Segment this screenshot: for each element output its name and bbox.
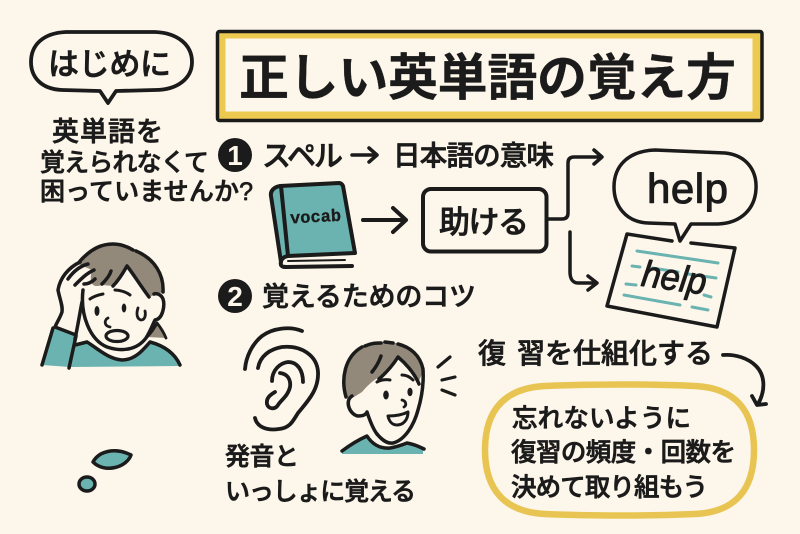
- speech bubble: spoken word: [614, 150, 756, 241]
- intro question text: [40, 117, 253, 206]
- icon: vocab book: [270, 183, 355, 267]
- meaning box: 助ける: [439, 205, 529, 240]
- speech bubble: introduction: [31, 32, 192, 103]
- pronunciation caption: [225, 443, 416, 506]
- intro question text: 英単語を: [52, 117, 163, 147]
- shirt: [342, 436, 423, 454]
- raised hand: [55, 262, 82, 339]
- pronunciation caption: 発音と: [225, 443, 299, 471]
- arrow: book to meaning box: [363, 208, 406, 232]
- meaning box: [423, 189, 546, 252]
- branch arrow to spoken word: [547, 150, 602, 219]
- branch arrow to written word: [570, 232, 597, 290]
- callout text: 忘れないように: [512, 405, 691, 433]
- step 1 badge: [218, 138, 252, 172]
- title banner: [218, 32, 762, 120]
- sleeve and shoulders: [42, 328, 180, 368]
- icon: worried person: [42, 244, 180, 368]
- step 2 heading: 覚えるためのコツ: [262, 282, 476, 312]
- step 1 heading: 日本語の意味: [393, 140, 554, 171]
- step 1 heading: スペル: [262, 141, 343, 173]
- step 2 badge: [218, 279, 252, 313]
- card word: help: [639, 253, 709, 303]
- review callout box: 決めて取り組もう: [511, 474, 708, 502]
- pronunciation caption: いっしょに覚える: [225, 478, 416, 506]
- intro question text: 覚えられなくて: [40, 149, 209, 177]
- curved arrow to review box: [723, 355, 766, 405]
- bubble label: はじめに: [48, 47, 171, 82]
- hair: [78, 244, 163, 297]
- sweater: [70, 342, 180, 367]
- arrow: spelling to meaning: [352, 148, 377, 162]
- book label: vocab: [290, 208, 342, 229]
- step 1 heading: [262, 140, 554, 173]
- review heading: 復: [478, 338, 506, 369]
- outlines: [80, 244, 163, 297]
- spoken word: help: [647, 165, 728, 212]
- card text lines: [624, 251, 718, 310]
- outlines: [344, 342, 423, 443]
- review callout box: 復習の頻度・回数を: [511, 439, 736, 467]
- step 1 badge: 1: [227, 140, 243, 171]
- intro question text: 困っていませんか?: [40, 178, 253, 206]
- icon: teal droplets: [79, 451, 131, 491]
- card: written word: [607, 234, 735, 327]
- step 2 badge: 2: [227, 281, 243, 312]
- title text: 正しい英単語の覚え方: [239, 50, 736, 106]
- review heading: 習を仕組化する: [517, 338, 713, 369]
- review callout box: [485, 384, 754, 516]
- icon: ear: [245, 328, 318, 430]
- face details: [90, 290, 130, 299]
- hair: [344, 342, 423, 398]
- icon: smiling boy: [342, 342, 455, 454]
- speech marks: [438, 357, 455, 395]
